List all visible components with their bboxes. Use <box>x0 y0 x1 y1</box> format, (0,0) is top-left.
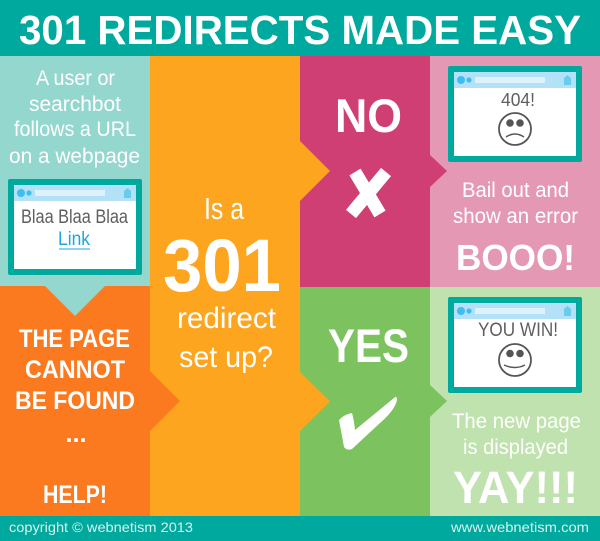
text: new page: The new page <box>452 410 581 433</box>
link: Link <box>58 229 90 250</box>
text: copyright: copyright © webnetism 2013 <box>9 519 193 535</box>
icon: sad face <box>499 113 531 145</box>
text: question: 301 <box>163 224 281 307</box>
text: website: www.webnetism.com <box>450 519 589 535</box>
browser: link page <box>8 179 142 275</box>
text: user follows URL: follows a URL <box>14 118 136 141</box>
text: YAY: YAY!!! <box>453 462 578 513</box>
text: question <box>163 191 281 374</box>
text: new page <box>452 410 581 459</box>
text: blaa: Blaa Blaa Blaa <box>21 207 128 228</box>
text: page cannot be found: HELP! <box>43 481 107 509</box>
header band <box>0 0 600 56</box>
text: new page: is displayed <box>463 436 568 459</box>
text: bail out: show an error <box>453 205 578 228</box>
text: user follows URL: A user or <box>36 67 115 90</box>
text: YES: YES <box>328 319 409 372</box>
text: BOOO: BOOO! <box>456 237 575 278</box>
panel: error result <box>430 56 600 287</box>
text: question: redirect <box>177 302 277 335</box>
panel: no <box>300 56 430 287</box>
text: page cannot be found <box>15 325 135 509</box>
text: user follows URL: on a webpage <box>9 145 140 168</box>
text: page cannot be found: BE FOUND <box>15 387 135 415</box>
text: page cannot be found: CANNOT <box>25 356 125 384</box>
panel: yes <box>300 287 430 516</box>
text: page cannot be found: ... <box>66 420 86 448</box>
text: question: set up? <box>179 341 273 374</box>
text: 404: 404! <box>501 90 535 110</box>
text: you win: YOU WIN! <box>478 320 558 341</box>
text: bail out <box>453 179 578 228</box>
panel: success result <box>430 287 600 516</box>
footer band <box>0 516 600 541</box>
icon: check mark <box>339 397 397 450</box>
browser: 404 page <box>448 66 582 162</box>
text: bail out: Bail out and <box>462 179 569 202</box>
text: NO: NO <box>335 89 402 142</box>
text: user follows URL <box>9 67 140 168</box>
browser: you win page <box>448 297 582 393</box>
text: user follows URL: searchbot <box>29 93 121 116</box>
panel: page cannot be found <box>0 286 150 516</box>
text: page cannot be found: THE PAGE <box>19 325 130 353</box>
panel: user follows URL <box>0 56 150 318</box>
text: question: Is a <box>204 191 245 226</box>
icon: cross <box>351 172 386 214</box>
title: 301 REDIRECTS MADE EASY <box>19 7 581 53</box>
panel: is a 301 set up <box>150 56 300 516</box>
icon: smiley face <box>499 344 531 376</box>
